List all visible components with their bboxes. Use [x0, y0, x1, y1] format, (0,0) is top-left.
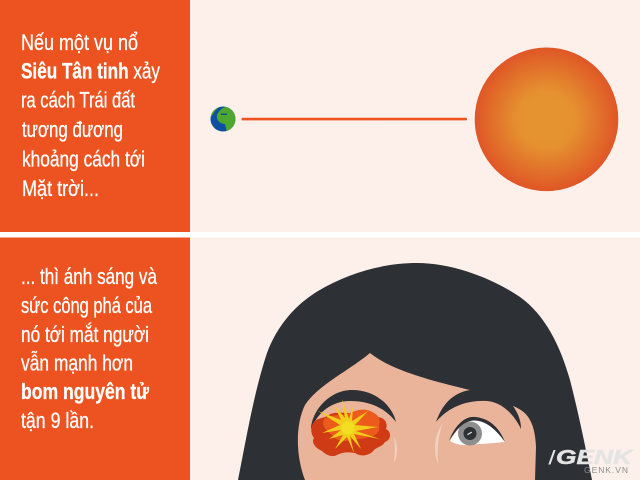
explosion star	[318, 399, 380, 453]
panel: bottom text block: vẫn mạnh hơn	[21, 350, 133, 376]
face	[298, 353, 536, 480]
panel: bottom text block	[0, 238, 190, 480]
panel: top text block: ra cách Trái đất	[21, 88, 135, 112]
panel: bottom text block: sức công phá của	[21, 293, 153, 318]
panel: top illustration background	[190, 0, 640, 232]
left eyebrow	[311, 390, 396, 429]
exploded eye	[311, 399, 390, 456]
watermark: GENK logo: /	[548, 447, 556, 469]
watermark: GENK logo: GENK.VN	[584, 465, 628, 475]
panel: top text block: tương đương	[22, 117, 123, 142]
panel: bottom text block: nó tới mắt người	[21, 322, 149, 347]
explosion cloud	[311, 411, 390, 456]
panel: top text block: Mặt trời...	[22, 176, 99, 201]
panel: bottom text block: ... thì ánh sáng và	[21, 264, 158, 289]
panel: top text block: Siêu Tân tinh xảy	[21, 58, 160, 84]
hair	[238, 263, 592, 480]
line: distance between earth and sun	[242, 118, 467, 120]
panel: bottom text block: tận 9 lần.	[21, 408, 94, 433]
illustration: woman's face	[238, 263, 592, 480]
panel: bottom text block: bom nguyên tử	[21, 379, 149, 404]
panel: top text block	[0, 0, 190, 232]
watermark: GENK logo	[548, 447, 634, 475]
panel: bottom illustration background	[190, 238, 640, 480]
right eye	[449, 417, 505, 446]
watermark: GENK logo: GENK	[556, 447, 634, 469]
icon: earth globe	[210, 106, 236, 132]
icon: sun / supernova	[475, 48, 618, 191]
panel: top text block: Nếu một vụ nổ	[21, 30, 138, 55]
cheek highlights	[394, 436, 397, 463]
panel: top text block: khoảng cách tới	[22, 146, 145, 172]
